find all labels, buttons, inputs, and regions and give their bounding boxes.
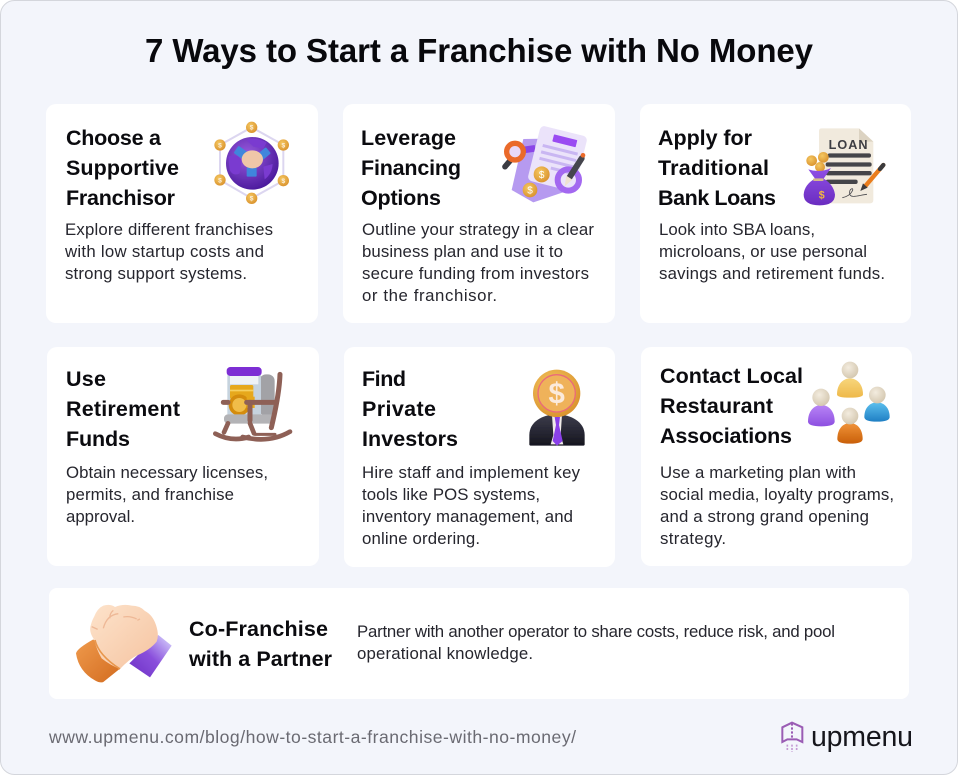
- heading: use retirement funds: [66, 367, 180, 451]
- heading: contact local restaurant associations: Associations: [660, 424, 792, 448]
- heading: apply for traditional bank loans: Traditional: [658, 156, 769, 180]
- text: staff and tools: Hire staff and implement key: [362, 463, 581, 482]
- panel: use retirement funds: [47, 347, 319, 566]
- text: sba loans: microloans, or use personal: [659, 242, 867, 261]
- icon: loan document and money bag: [804, 128, 883, 205]
- heading: contact local restaurant associations: Restaurant: [660, 394, 773, 418]
- text: partner with operator: [357, 622, 835, 663]
- heading: choose a supportive franchisor: Supportive: [66, 156, 179, 180]
- panel: contact local restaurant associations: [641, 347, 912, 566]
- text: partner with operator: operational knowledge.: [357, 644, 533, 663]
- heading: find private investors: Investors: [362, 427, 458, 451]
- icon: investor with dollar coin head: [529, 370, 585, 446]
- heading: apply for traditional bank loans: Apply for: [658, 126, 753, 150]
- heading: choose a supportive franchisor: Choose a: [66, 126, 162, 150]
- heading: leverage financing options: Leverage: [361, 126, 456, 150]
- panel: choose a supportive franchisor: [46, 104, 318, 323]
- icon: globe with coins network: $: [281, 142, 285, 149]
- text: licenses and permits: Obtain necessary licenses,: [66, 463, 268, 482]
- text: marketing plan: strategy.: [660, 529, 726, 548]
- title: 7 Ways to Start a Franchise with No Money: [145, 32, 814, 69]
- heading: use retirement funds: Retirement: [66, 397, 180, 421]
- icon: globe with coins network: $: [281, 178, 285, 185]
- heading: leverage financing options: [361, 126, 461, 210]
- icon: clasped hands: [76, 605, 172, 682]
- heading: find private investors: Private: [362, 397, 436, 421]
- text: business plan: or the franchisor.: [362, 286, 497, 305]
- text: explore franchises: Explore different franchises: [65, 220, 273, 239]
- icon: globe with coins network: [214, 122, 289, 204]
- icon: globe with coins network: $: [218, 177, 222, 184]
- heading: co-franchise with a partner: [188, 617, 333, 671]
- heading: leverage financing options: Options: [361, 186, 441, 210]
- panel: leverage financing options: [343, 104, 615, 323]
- text: staff and tools: tools like POS systems,: [362, 485, 540, 504]
- heading: apply for traditional bank loans: Bank Loans: [658, 186, 776, 210]
- heading: co-franchise with a partner: Co-Franchise: [189, 617, 328, 641]
- text: business plan: Outline your strategy in a clear: [362, 220, 594, 239]
- logo: upmenu: upmenu: [811, 721, 913, 753]
- heading: contact local restaurant associations: [660, 364, 803, 448]
- icon: open book mark: [782, 723, 802, 752]
- text: staff and tools: online ordering.: [362, 529, 480, 548]
- icon: globe with coins network: $: [218, 142, 222, 149]
- text: business plan: business plan and use it to: [362, 242, 563, 261]
- panel: find private investors: [344, 347, 615, 567]
- text: sba loans: savings and retirement funds.: [659, 264, 885, 283]
- heading: find private investors: Find: [362, 367, 406, 391]
- text: licenses and permits: [66, 463, 268, 526]
- text: marketing plan: [660, 463, 894, 548]
- icon: documents, magnifier and pen: $: [527, 186, 533, 197]
- heading: apply for traditional bank loans: [658, 126, 776, 210]
- text: business plan: secure funding from investors: [362, 264, 589, 283]
- text: staff and tools: [362, 463, 581, 548]
- icon: group of people: [808, 362, 890, 444]
- source url: www.upmenu.com/blog/how-to-start-a-franchise-with-no-money/: [48, 727, 576, 747]
- icon: loan document and money bag: LOAN: [829, 138, 869, 152]
- text: licenses and permits: permits, and franchise: [66, 485, 234, 504]
- heading: find private investors: [362, 367, 458, 451]
- heading: contact local restaurant associations: Contact Local: [660, 364, 803, 388]
- heading: use retirement funds: Use: [66, 367, 106, 391]
- text: explore franchises: [64, 220, 273, 283]
- text: marketing plan: and a strong grand opening: [660, 507, 869, 526]
- text: sba loans: Look into SBA loans,: [659, 220, 815, 239]
- text: marketing plan: social media, loyalty programs,: [660, 485, 894, 504]
- text: business plan: [362, 220, 594, 305]
- text: partner with operator: Partner with another operator to share costs, reduce risk, and pool: [357, 622, 835, 641]
- icon: coin jar on rocking chair: [215, 367, 290, 439]
- heading: use retirement funds: Funds: [66, 427, 130, 451]
- text: marketing plan: Use a marketing plan with: [660, 463, 856, 482]
- text: explore franchises: with low startup costs and: [64, 242, 264, 261]
- icon: documents, magnifier and pen: [505, 125, 588, 202]
- text: staff and tools: inventory management, and: [362, 507, 573, 526]
- text: explore franchises: strong support systems.: [65, 264, 247, 283]
- panel: apply for traditional bank loans: [640, 104, 911, 323]
- heading: choose a supportive franchisor: Franchisor: [66, 186, 176, 210]
- text: sba loans: [659, 220, 885, 283]
- panel: co-franchise with a partner: [49, 588, 909, 699]
- text: licenses and permits: approval.: [66, 507, 135, 526]
- heading: choose a supportive franchisor: [66, 126, 179, 210]
- icon: investor with dollar coin head: $: [549, 378, 565, 411]
- heading: co-franchise with a partner: with a Partner: [188, 647, 333, 671]
- icon: documents, magnifier and pen: $: [539, 170, 545, 181]
- heading: leverage financing options: Financing: [361, 156, 461, 180]
- icon: globe with coins network: $: [250, 125, 254, 132]
- icon: loan document and money bag: $: [819, 189, 825, 201]
- icon: globe with coins network: $: [250, 196, 254, 203]
